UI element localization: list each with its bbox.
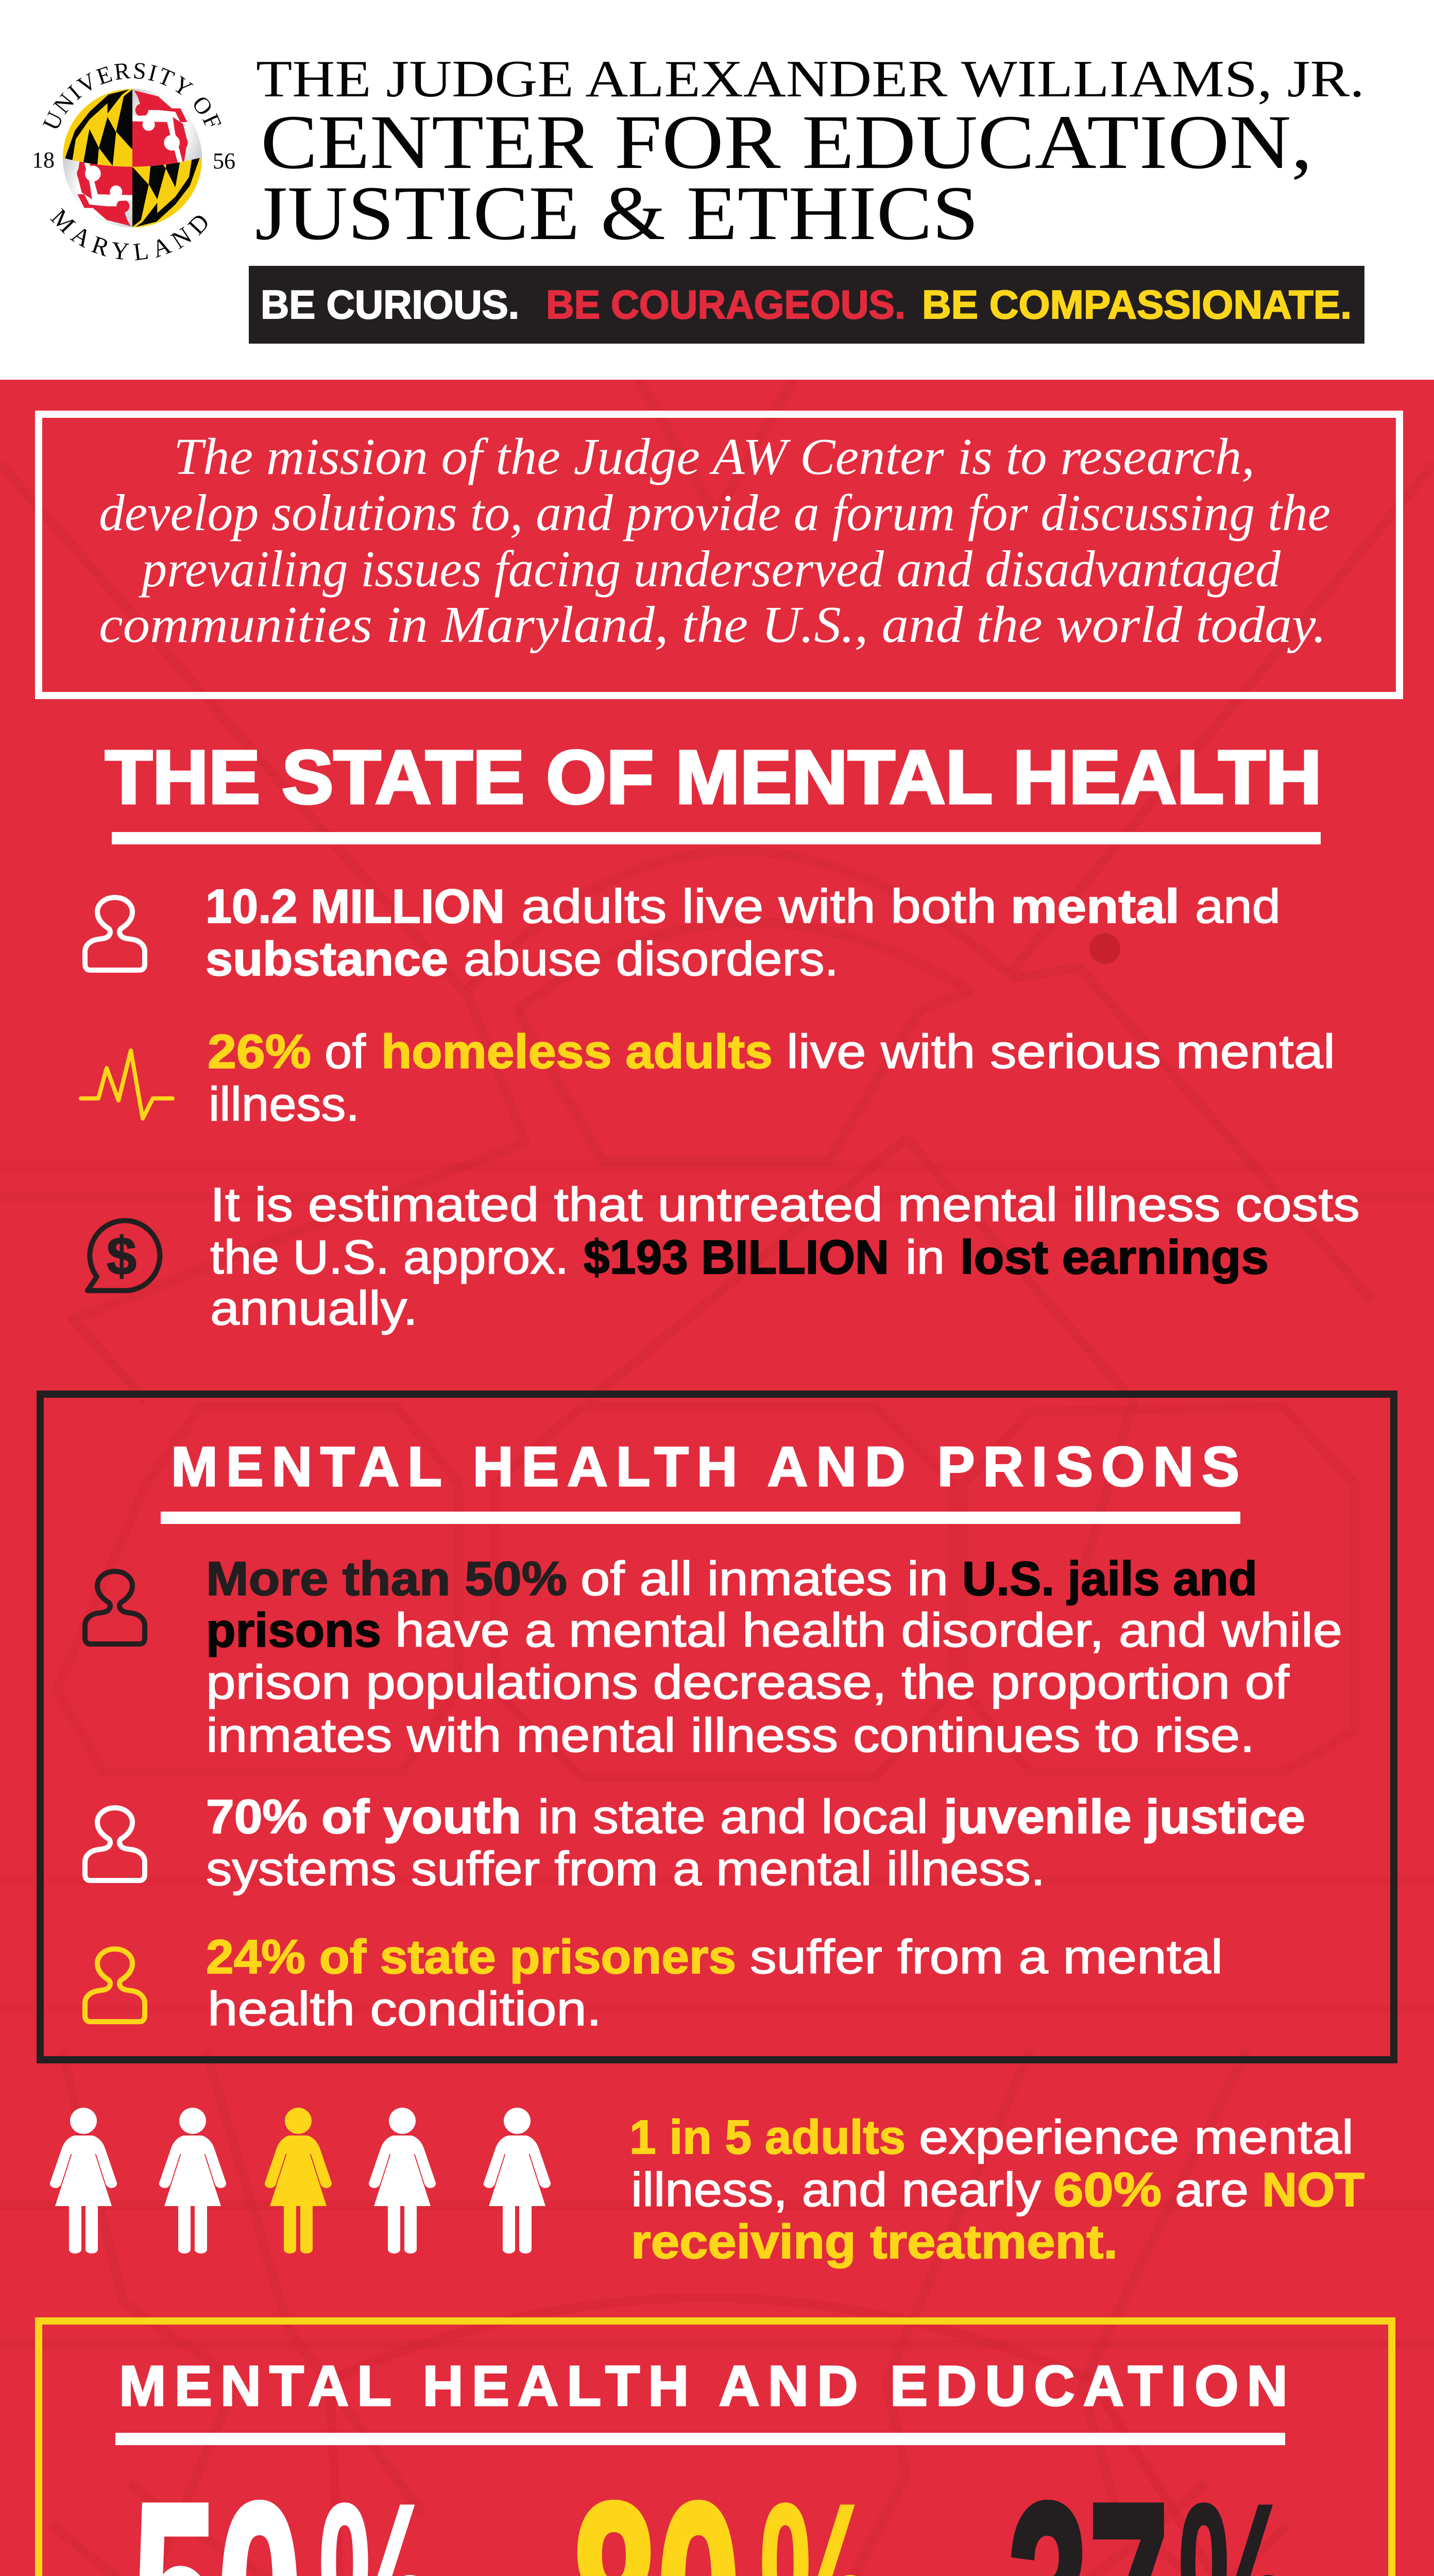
panel: mental health and education <box>39 2321 1392 2576</box>
panel: mission statement: develop solutions to, and provide a forum for discussing the <box>99 484 1330 541</box>
stat: 1 in 5 adults: receiving treatment. <box>631 2215 1118 2268</box>
stat: more than 50 percent <box>206 1552 1342 1762</box>
icon: pulse <box>81 1050 173 1118</box>
logo: University of Maryland: 56 <box>213 148 235 174</box>
stat: 70 percent of youth <box>206 1790 1305 1895</box>
dark dot <box>1089 933 1120 964</box>
heading: prisons: MENTAL HEALTH AND PRISONS <box>171 1435 1239 1498</box>
stat: 193 billion: in <box>906 1230 945 1284</box>
stat: 26 percent: of <box>325 1025 366 1078</box>
stat: more than 50 percent: have a mental health disorder, and while <box>395 1603 1342 1657</box>
stat: 70 percent of youth: juvenile justice <box>943 1790 1305 1843</box>
header title <box>255 50 1364 256</box>
panel: mission statement: prevailing issues facing underserved and disadvantaged <box>139 540 1281 598</box>
icon: dollar speech bubble: $ <box>107 1227 136 1286</box>
heading: the state of mental health: THE STATE OF MENTAL HEALTH <box>105 735 1322 820</box>
stat: more than 50 percent: inmates with mental illness continues to rise. <box>206 1708 1255 1762</box>
icon: person <box>85 897 145 970</box>
stat: 24 percent of state prisoners: 24% of state prisoners <box>206 1930 736 1984</box>
header title: THE JUDGE ALEXANDER WILLIAMS, JR. <box>256 50 1364 108</box>
stat: 70 percent of youth: systems suffer from a mental illness. <box>206 1842 1045 1895</box>
stat: 10.2 million <box>206 879 1281 986</box>
icon: white person <box>85 1808 145 1880</box>
stat: 1 in 5 adults: experience mental <box>919 2110 1354 2164</box>
panel: mission statement: communities in Maryland, the U.S., and the world today. <box>99 596 1326 653</box>
stat: 1 in 5 adults: NOT <box>1262 2163 1364 2216</box>
stat: 193 billion <box>210 1178 1360 1335</box>
stat: 26 percent <box>208 1025 1335 1131</box>
icon: yellow person <box>85 1949 145 2022</box>
stat: 10.2 million: and <box>1195 879 1281 933</box>
stat: more than 50 percent: prison populations decrease, the proportion of <box>206 1655 1289 1709</box>
logo: University of Maryland <box>32 63 235 261</box>
stat: 24 percent of state prisoners <box>206 1930 1223 2036</box>
stat: 70 percent of youth: in state and local <box>538 1790 928 1843</box>
tagline bar: BE CURIOUS. <box>261 282 519 327</box>
stat: more than 50 percent: More than 50% <box>206 1552 567 1605</box>
logo: University of Maryland: 18 <box>32 147 55 173</box>
heading: education <box>115 2354 1288 2445</box>
stat: more than 50 percent: prisons <box>206 1603 381 1657</box>
stat: 193 billion: It is estimated that untreated mental illness costs <box>210 1178 1360 1231</box>
stat: 24 percent of state prisoners: health condition. <box>208 1982 602 2036</box>
stat: 1 in 5 adults: 1 in 5 adults <box>629 2110 906 2164</box>
stat: 193 billion: the U.S. approx. <box>210 1230 569 1284</box>
stat: 10.2 million: 10.2 MILLION <box>206 879 505 933</box>
panel: mental health and prisons <box>40 1394 1394 2060</box>
tagline bar: BE COMPASSIONATE. <box>922 282 1352 327</box>
stat: 26 percent: 26% <box>208 1025 311 1078</box>
stat: 24 percent of state prisoners: suffer from a mental <box>750 1930 1223 1984</box>
stat: 193 billion: annually. <box>210 1281 418 1335</box>
stat: 1 in 5 adults: are <box>1175 2163 1249 2216</box>
header title: CENTER FOR EDUCATION, <box>261 99 1312 185</box>
logo: University of Maryland: UNIVERSITY OF <box>42 63 221 128</box>
logo: University of Maryland: MARYLAND <box>50 208 207 261</box>
stat: 1 in 5 adults <box>629 2110 1364 2268</box>
stat: 10.2 million: abuse disorders. <box>464 932 839 986</box>
stat: 10.2 million: mental <box>1011 879 1180 933</box>
stat: 10.2 million: adults live with both <box>521 879 997 933</box>
stat: 1 in 5 adults: 60% <box>1053 2163 1162 2216</box>
stat: 26 percent: live with serious mental <box>787 1025 1335 1078</box>
stat: 1 in 5 adults: illness, and nearly <box>631 2163 1042 2216</box>
heading: education: MENTAL HEALTH AND EDUCATION <box>119 2354 1288 2418</box>
stat: 193 billion: $193 BILLION <box>584 1230 889 1284</box>
pictogram: five women, one highlighted <box>50 2108 551 2253</box>
panel: mission statement: The mission of the Judge AW Center is to research, <box>174 428 1255 485</box>
stat: 70 percent of youth: 70% of youth <box>206 1790 521 1843</box>
stat: 26 percent: illness. <box>209 1077 360 1131</box>
header title: JUSTICE & ETHICS <box>255 171 979 256</box>
stat: more than 50 percent: U.S. jails and <box>962 1552 1257 1605</box>
stat: more than 50 percent: of all inmates in <box>581 1552 948 1605</box>
stat: 26 percent: homeless adults <box>381 1025 773 1078</box>
icon: dark person <box>85 1571 145 1644</box>
tagline bar <box>249 266 1364 344</box>
icon: dollar speech bubble <box>88 1221 160 1291</box>
panel: mission statement <box>39 414 1399 696</box>
tagline bar: BE COURAGEOUS. <box>546 282 906 327</box>
stat: 193 billion: lost earnings <box>960 1230 1269 1284</box>
stat: 10.2 million: substance <box>206 932 448 986</box>
